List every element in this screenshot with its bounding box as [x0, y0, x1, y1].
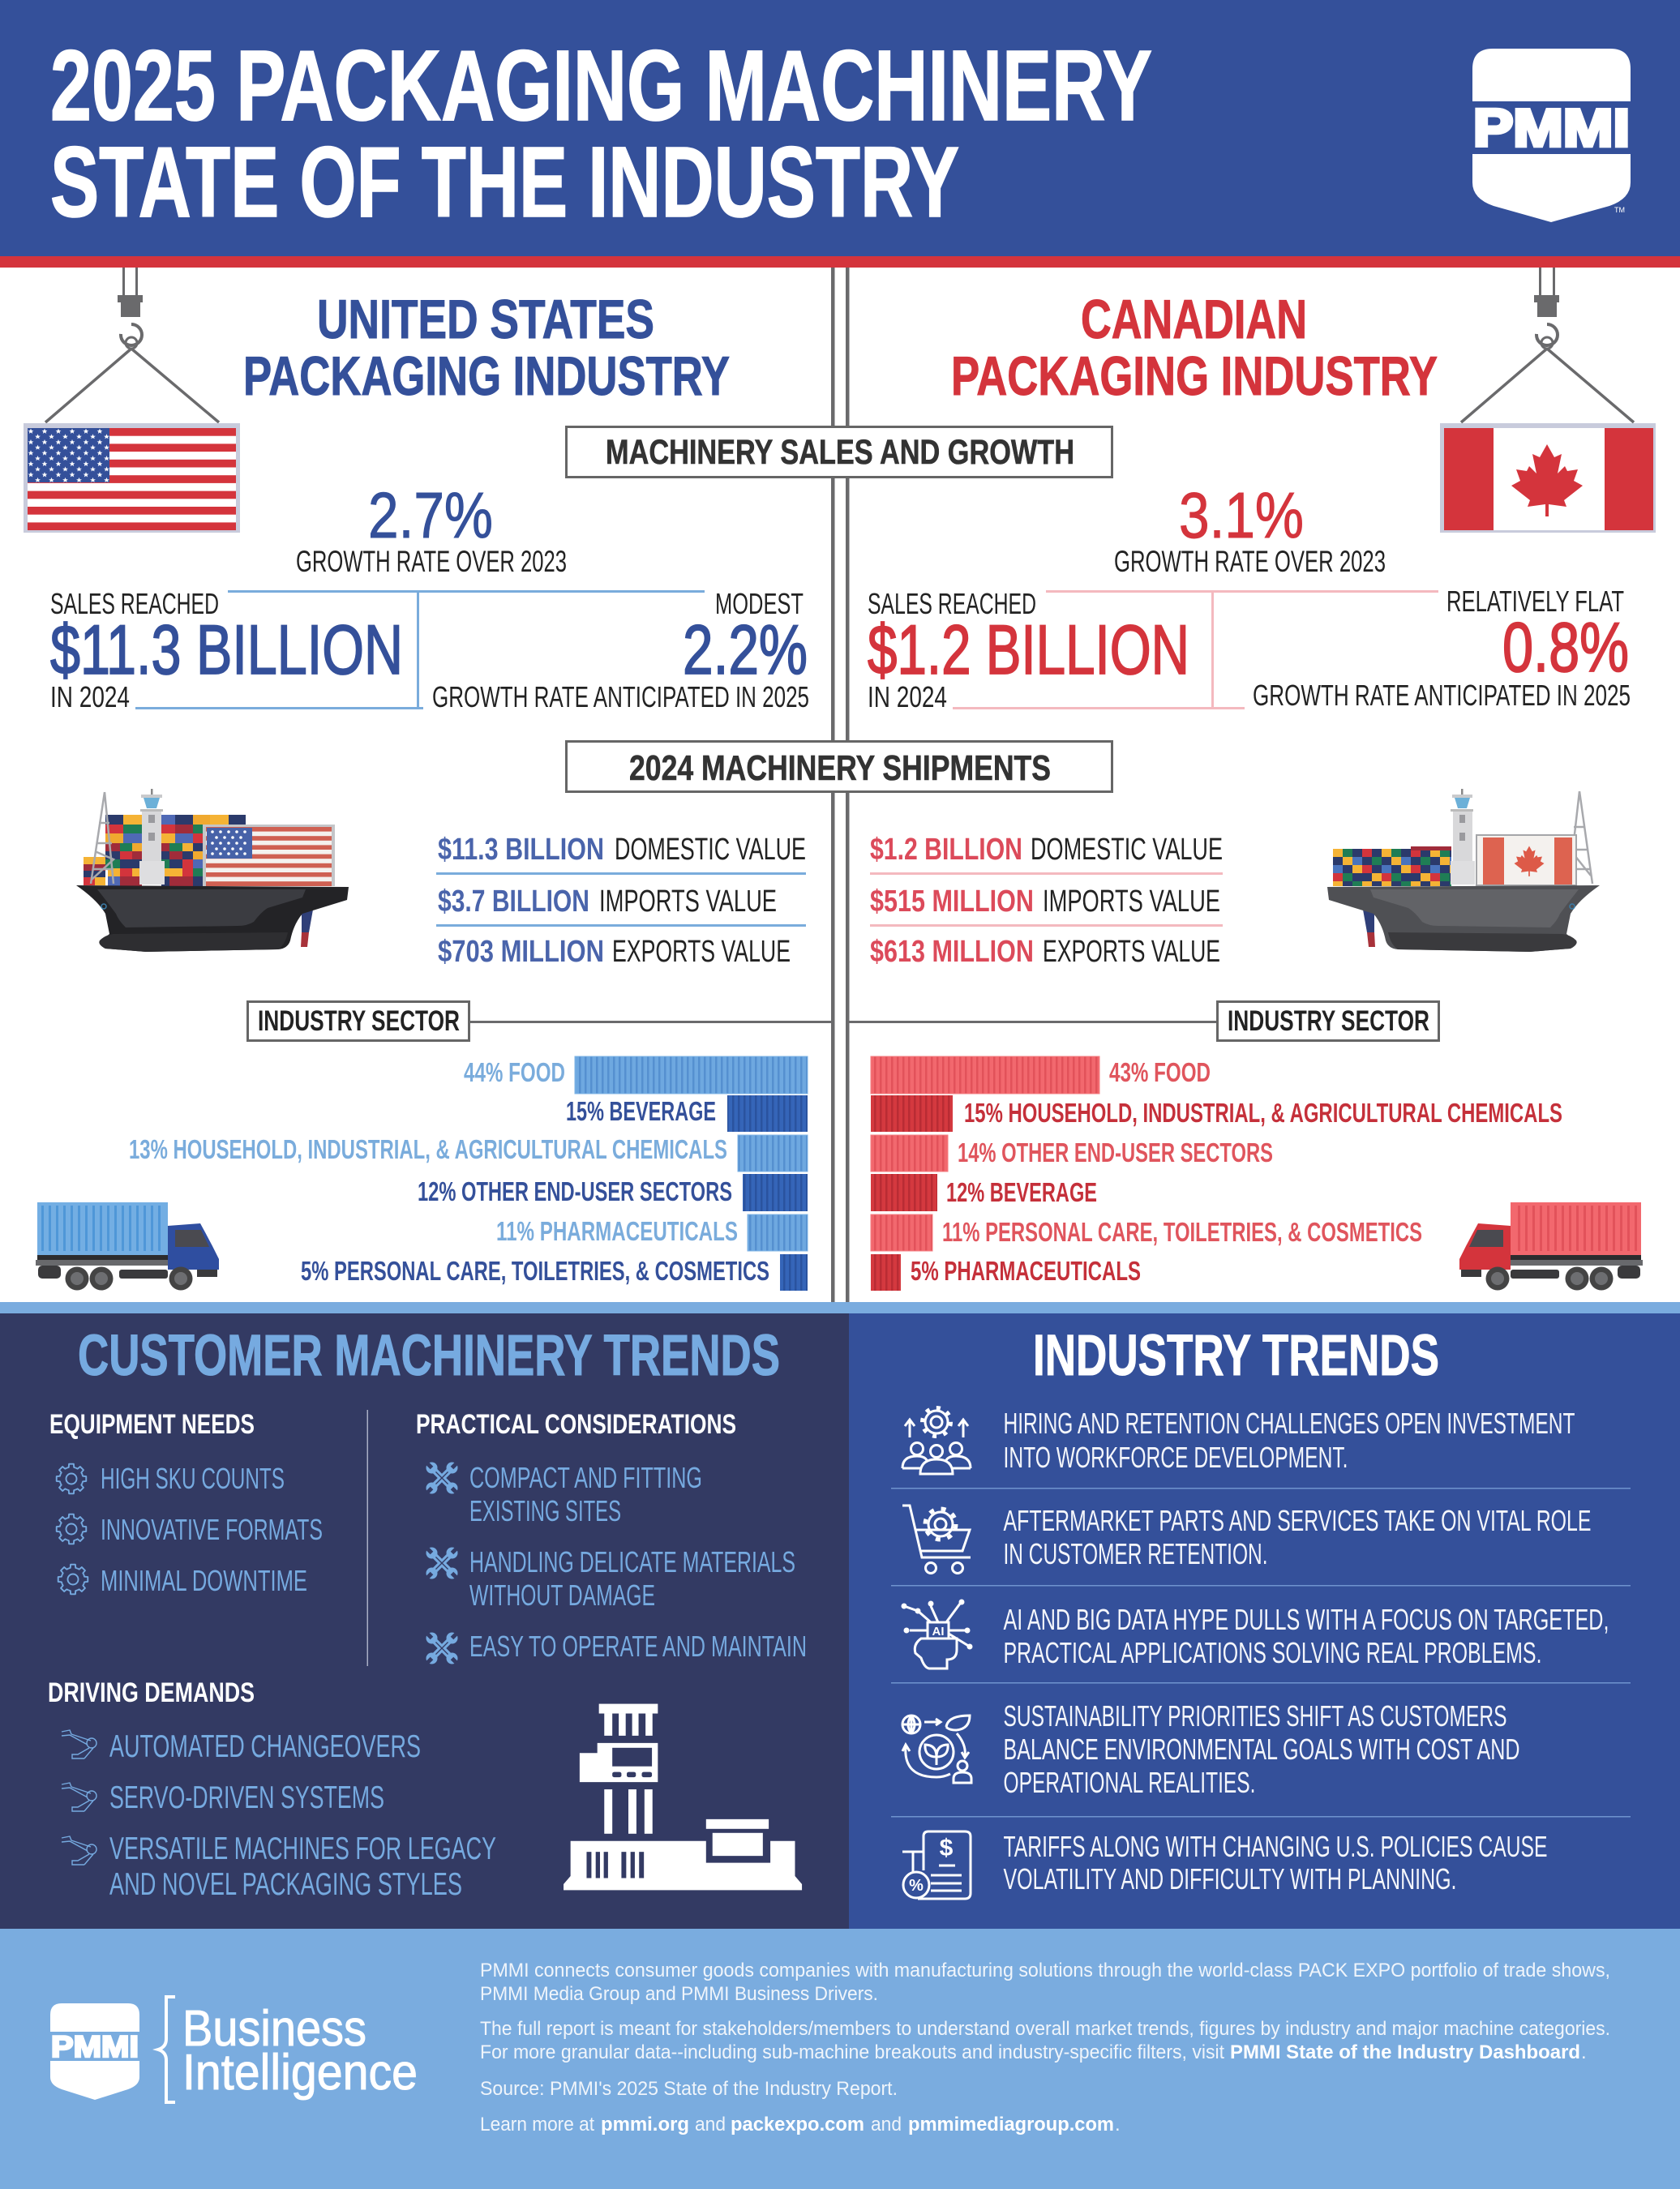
trend: tariffs: $: [940, 1835, 954, 1861]
logo: PMMI Business Intelligence: Business: [182, 2001, 366, 2057]
trend: hiring and retention: [902, 1407, 1575, 1474]
text block: about PMMI: Learn more at: [480, 2114, 594, 2135]
icon: US flag: [24, 423, 240, 533]
bar chart: US industry sectors: 11% PHARMACEUTICALS: [496, 1216, 738, 1246]
text block: about PMMI: and: [695, 2114, 726, 2135]
list: practical considerations: EXISTING SITES: [469, 1494, 621, 1527]
text block: about PMMI: PMMI Media Group and PMMI Business Drivers.: [480, 1983, 878, 2005]
text block: about PMMI: The full report is meant for stakeholders/members to understand overall market trends, figures by industry and major machine categories.: [480, 2018, 1610, 2040]
list: US shipment values: $703 MILLION: [438, 935, 604, 969]
list: US shipment values: IMPORTS VALUE: [599, 885, 777, 919]
text block: about PMMI: PMMI connects consumer goods companies with manufacturing solutions through the world-class PACK EXPO portfolio of trade shows,: [480, 1960, 1610, 1981]
logo: PMMI shield: TM: [1614, 206, 1625, 214]
trend: tariffs: VOLATILITY AND DIFFICULTY WITH PLANNING.: [1004, 1862, 1456, 1896]
trend: AI and big data: AI: [932, 1625, 944, 1639]
list: US shipment values: [436, 833, 806, 969]
heading: United States: PACKAGING INDUSTRY: [243, 345, 730, 407]
list: driving demands: DRIVING DEMANDS: [48, 1677, 255, 1708]
panel: US sales stats: [50, 479, 809, 713]
list: practical considerations: WITHOUT DAMAGE: [469, 1579, 655, 1612]
logo: PMMI Business Intelligence: PMMI: [51, 2030, 139, 2063]
icon: blue truck: [36, 1202, 219, 1291]
trend: hiring and retention: INTO WORKFORCE DEVELOPMENT.: [1004, 1441, 1348, 1474]
bar chart: Canadian industry sectors: 14% OTHER END-USER SECTORS: [958, 1137, 1273, 1167]
icon: red truck: [1459, 1202, 1643, 1291]
bar chart: US industry sectors: 12% OTHER END-USER SECTORS: [418, 1176, 732, 1206]
bar chart: Canadian industry sectors: 11% PERSONAL CARE, TOILETRIES, & COSMETICS: [942, 1217, 1422, 1247]
list: Canadian shipment values: $1.2 BILLION: [870, 833, 1022, 867]
section heading: 2024 machinery shipments: 2024 MACHINERY SHIPMENTS: [629, 748, 1051, 788]
section heading: US industry sector: INDUSTRY SECTOR: [258, 1005, 460, 1037]
panel: Canadian sales stats: SALES REACHED: [868, 587, 1036, 620]
icon: packaging machine: [564, 1704, 802, 1890]
trend: aftermarket parts: IN CUSTOMER RETENTION.: [1004, 1537, 1268, 1570]
list: US shipment values: $11.3 BILLION: [438, 833, 604, 867]
title: [50, 31, 1152, 238]
list: driving demands: AND NOVEL PACKAGING STYLES: [109, 1867, 462, 1902]
panel: Canadian sales stats: GROWTH RATE OVER 2023: [1114, 545, 1386, 578]
list: equipment needs: MINIMAL DOWNTIME: [101, 1564, 307, 1597]
text block: about PMMI: [480, 1960, 1610, 2135]
panel: US sales stats: SALES REACHED: [50, 587, 219, 620]
list: driving demands: [48, 1677, 496, 1902]
heading: customer machinery trends: CUSTOMER MACHINERY TRENDS: [78, 1324, 780, 1388]
list: equipment needs: HIGH SKU COUNTS: [101, 1462, 285, 1495]
list: equipment needs: [49, 1409, 323, 1597]
list: practical considerations: HANDLING DELICATE MATERIALS: [469, 1545, 795, 1579]
logo: PMMI shield: PMMI: [1473, 98, 1630, 157]
trend: tariffs: %: [909, 1877, 924, 1895]
list: US shipment values: DOMESTIC VALUE: [615, 833, 806, 867]
panel: industry trends: [849, 1313, 1680, 1929]
list: equipment needs: EQUIPMENT NEEDS: [49, 1409, 255, 1440]
trend: tariffs: [902, 1830, 1547, 1899]
heading: United States: UNITED STATES: [317, 289, 654, 350]
panel: Canadian sales stats: [868, 479, 1631, 713]
bar chart: US industry sectors: 5% PERSONAL CARE, TOILETRIES, & COSMETICS: [301, 1256, 769, 1286]
panel: US sales stats: IN 2024: [50, 680, 130, 713]
list: equipment needs: INNOVATIVE FORMATS: [101, 1513, 323, 1546]
panel: Canadian sales stats: IN 2024: [868, 680, 947, 713]
list: practical considerations: EASY TO OPERATE AND MAINTAIN: [469, 1630, 807, 1663]
crane hook with Canadian flag: [1440, 268, 1656, 533]
icon: Canadian cargo ship: [1327, 789, 1600, 952]
text block: about PMMI: packexpo.com: [731, 2114, 864, 2135]
list: Canadian shipment values: $613 MILLION: [870, 935, 1034, 969]
list: practical considerations: COMPACT AND FITTING: [469, 1461, 702, 1494]
bar chart: US industry sectors: 15% BEVERAGE: [566, 1096, 716, 1126]
bar chart: Canadian industry sectors: 5% PHARMACEUTICALS: [911, 1256, 1141, 1286]
list: Canadian shipment values: IMPORTS VALUE: [1043, 885, 1220, 919]
list: driving demands: SERVO-DRIVEN SYSTEMS: [109, 1780, 384, 1815]
panel: US sales stats: MODEST: [715, 587, 804, 620]
section heading: machinery sales and growth: [566, 426, 1112, 477]
panel: US sales stats: GROWTH RATE OVER 2023: [296, 545, 567, 578]
logo: PMMI Business Intelligence: [49, 1997, 418, 2102]
text block: about PMMI: pmmimediagroup.com: [908, 2114, 1114, 2135]
panel: customer machinery trends: [0, 1313, 849, 1929]
section heading: Canadian industry sector: INDUSTRY SECTOR: [1228, 1005, 1429, 1037]
list: practical considerations: [416, 1409, 807, 1664]
title: 2025 PACKAGING MACHINERY: [50, 31, 1152, 142]
list: Canadian shipment values: EXPORTS VALUE: [1043, 935, 1220, 969]
text block: about PMMI: pmmi.org: [601, 2114, 689, 2135]
panel: Canadian sales stats: 3.1%: [1179, 479, 1304, 551]
center divider: [831, 268, 850, 1302]
bar chart: US industry sectors: 44% FOOD: [464, 1057, 565, 1087]
list: US shipment values: EXPORTS VALUE: [612, 935, 791, 969]
list: US shipment values: $3.7 BILLION: [438, 885, 589, 919]
heading: Canadian: PACKAGING INDUSTRY: [951, 345, 1438, 407]
panel: US sales stats: $11.3 BILLION: [50, 611, 403, 689]
list: Canadian shipment values: DOMESTIC VALUE: [1031, 833, 1223, 867]
trend: sustainability: OPERATIONAL REALITIES.: [1004, 1766, 1255, 1799]
header band: [0, 0, 1680, 268]
section heading: US industry sector: [248, 1002, 831, 1041]
crane hook with US flag: [24, 268, 240, 533]
panel: US sales stats: GROWTH RATE ANTICIPATED IN 2025: [432, 680, 809, 713]
list: Canadian shipment values: [870, 833, 1223, 969]
text block: about PMMI: .: [1115, 2114, 1121, 2135]
section heading: 2024 machinery shipments: [566, 741, 1112, 791]
text block: about PMMI: Source: PMMI's 2025 State of the Industry Report.: [480, 2078, 898, 2100]
list: driving demands: VERSATILE MACHINES FOR LEGACY: [109, 1831, 496, 1866]
section heading: machinery sales and growth: MACHINERY SALES AND GROWTH: [606, 433, 1074, 472]
footer panel: [0, 1929, 1680, 2189]
list: Canadian shipment values: $515 MILLION: [870, 885, 1034, 919]
bar chart: Canadian industry sectors: 43% FOOD: [1109, 1057, 1211, 1087]
panel: Canadian sales stats: 0.8%: [1502, 609, 1629, 687]
bar chart: Canadian industry sectors: 12% BEVERAGE: [946, 1177, 1097, 1207]
heading: Canadian: CANADIAN: [1081, 289, 1307, 350]
logo: PMMI Business Intelligence: Intelligence: [182, 2045, 418, 2101]
list: practical considerations: PRACTICAL CONSIDERATIONS: [416, 1409, 736, 1440]
text block: about PMMI: For more granular data--including sub-machine breakouts and industry-specific filters, visit: [480, 2041, 1224, 2063]
heading: Canadian: [951, 289, 1438, 407]
bar chart: US industry sectors: 13% HOUSEHOLD, INDUSTRIAL, & AGRICULTURAL CHEMICALS: [129, 1134, 727, 1164]
text block: about PMMI: and: [871, 2114, 902, 2135]
panel: US sales stats: 2.7%: [368, 479, 493, 551]
list: driving demands: AUTOMATED CHANGEOVERS: [109, 1729, 421, 1764]
trend: sustainability: [902, 1699, 1519, 1799]
bar chart: US industry sectors: [129, 1056, 808, 1291]
trend: AI and big data: [902, 1599, 1609, 1669]
icon: US cargo ship: [76, 789, 349, 952]
light blue separator band: [0, 1302, 1680, 1313]
panel: US sales stats: 2.2%: [683, 611, 808, 689]
bar chart: Canadian industry sectors: [871, 1056, 1562, 1291]
icon: Canadian flag: [1440, 423, 1656, 533]
heading: United States: [243, 289, 730, 407]
text block: about PMMI: PMMI State of the Industry Dashboard: [1230, 2041, 1580, 2063]
section heading: Canadian industry sector: [849, 1002, 1438, 1041]
heading: industry trends: INDUSTRY TRENDS: [1033, 1324, 1439, 1388]
text block: about PMMI: .: [1581, 2041, 1587, 2063]
title: STATE OF THE INDUSTRY: [50, 127, 959, 238]
panel: Canadian sales stats: $1.2 BILLION: [868, 611, 1189, 689]
trend: aftermarket parts: [902, 1504, 1591, 1573]
logo: PMMI shield: [1468, 49, 1635, 222]
